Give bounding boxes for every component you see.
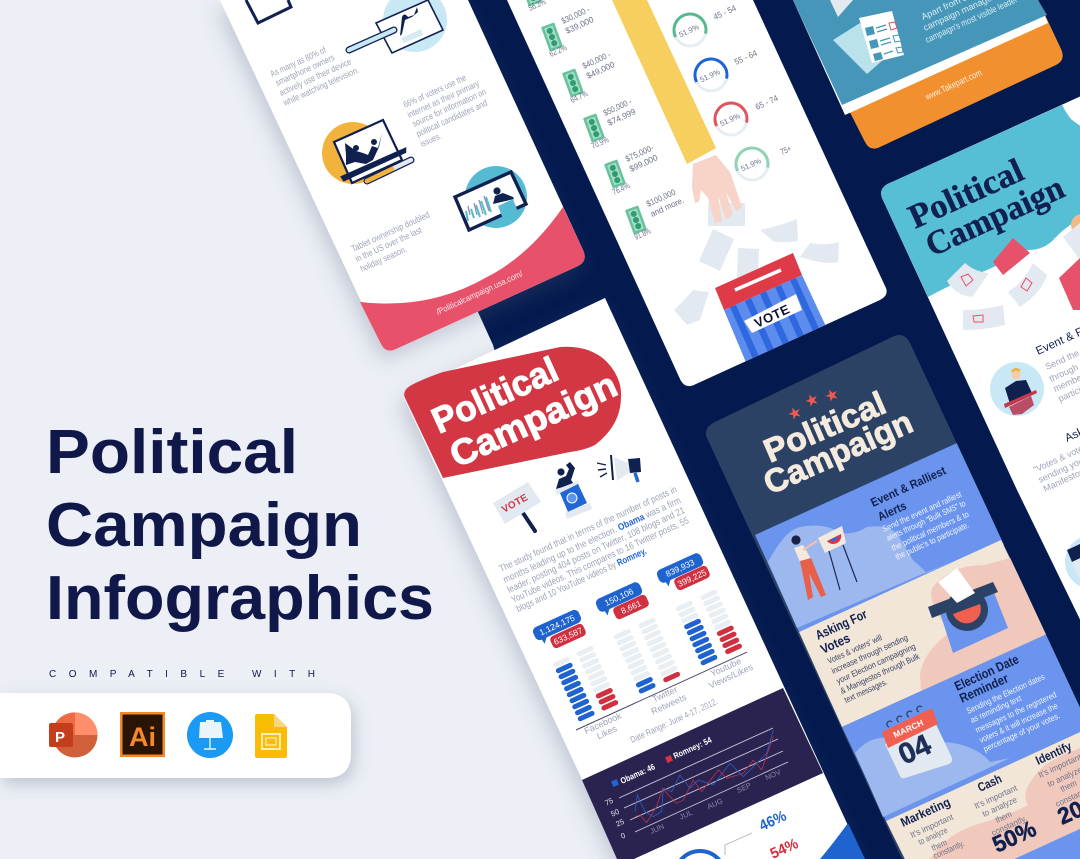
income labels: $74,999 (606, 106, 637, 128)
text: asking for votes paragraph: increase through sending (830, 632, 910, 676)
axis labels: Facebook (583, 710, 623, 736)
ballot box: VOTE (752, 301, 792, 331)
grid lines (619, 728, 788, 832)
age labels: 55 - 64 (733, 48, 759, 67)
value bubbles: 150,106 (603, 586, 635, 608)
axis labels: Likes (595, 723, 619, 741)
title: Campaign (758, 403, 918, 501)
gauge labels: 51.9% (698, 67, 722, 84)
text: cash description: to analyze (981, 794, 1019, 819)
age labels (712, 3, 793, 157)
icon: three stars: ★ (822, 385, 842, 407)
text: smartphone statistic (269, 45, 360, 108)
footer url: www.Takepart.com (923, 67, 983, 102)
panel: compatibility pill (0, 693, 351, 778)
icon: megaphone (597, 455, 641, 482)
icon: illustrator (120, 712, 165, 757)
falling ballots (947, 238, 1047, 330)
legend: Obama: 46 (619, 761, 657, 786)
heading: asking for votes (816, 611, 866, 653)
section: election date reminder (842, 634, 1080, 821)
text: identify description (1038, 754, 1080, 806)
panel: dark card with sections (700, 330, 1080, 859)
income labels: $99,000 (628, 152, 659, 174)
income labels: 62.2% (548, 42, 569, 59)
icon: calendar march 04: MARCH (892, 717, 925, 740)
icon: illustrator: Ai (129, 722, 156, 752)
axis labels: Youtube (709, 656, 743, 679)
text: election date paragraph: Sending the Election dates (965, 671, 1046, 716)
text: smartphone statistic: while watching television. (281, 65, 360, 108)
heading: identify: Identify (1033, 739, 1074, 768)
panel: teal-header card on right (881, 92, 1080, 640)
title: Political (425, 348, 564, 441)
heading: asking for votes: Asking For (813, 606, 869, 643)
heading: asking for votes: Votes (818, 630, 852, 657)
compatible with label: COMPATIBLE WITH (49, 669, 315, 680)
text: election date paragraph: messages to the registered (974, 689, 1058, 735)
heading: election date (954, 657, 1019, 703)
heading: event alerts: Alerts (875, 498, 909, 524)
red title banner (404, 347, 621, 478)
text: internet statistic: political candidates and (415, 98, 489, 139)
youtube views bars (675, 589, 743, 666)
text: marketing description: It's important (909, 811, 955, 840)
text: votes paragraph (1032, 439, 1080, 494)
age labels: 45 - 54 (712, 3, 738, 22)
panel: pink-footer card with device statistics (220, 0, 585, 351)
text: asking for votes paragraph: text messages. (843, 677, 889, 705)
gauge labels: 51.9% (739, 156, 763, 173)
x axis labels: NOV (764, 767, 782, 782)
income labels: 76.4% (611, 180, 632, 197)
icon: phone fragment (246, 0, 291, 23)
icon: dollar bills by income (520, 0, 647, 235)
text: event paragraph (1046, 352, 1080, 404)
axis labels (583, 656, 755, 741)
icon: speaker at podium (555, 462, 592, 519)
polling lines (635, 730, 773, 823)
income labels: $75,000- (624, 142, 655, 164)
text: marketing description: to analyze (917, 825, 949, 847)
hand (692, 155, 742, 223)
donut chart (675, 851, 725, 859)
income labels: 70.9% (590, 134, 611, 151)
text: tablet statistic: Tablet ownership doubled (350, 209, 431, 254)
value bubbles: 633,587 (552, 625, 584, 647)
income labels: and more. (649, 195, 686, 219)
text: internet statistic (402, 73, 489, 149)
text: study paragraph (498, 484, 691, 615)
axis labels: Twitter (651, 684, 679, 704)
value bubbles: 399,225 (676, 567, 708, 589)
teal header wave (881, 105, 1080, 297)
icon: google slides (255, 714, 287, 758)
icon: vote sign (493, 482, 541, 531)
income labels (527, 0, 686, 242)
text: identify description: them (1059, 778, 1078, 794)
text: cash description: constantly. (990, 813, 1028, 838)
income labels: 64.7% (569, 88, 590, 105)
text: internet statistic: issues. (419, 131, 443, 149)
text: asking for votes paragraph: your Election campaigning (835, 641, 917, 686)
age labels: 75+ (779, 143, 793, 157)
section: marketing cash identify (886, 727, 1080, 859)
text: tablet statistic: holiday season. (359, 244, 408, 274)
icon: keynote (187, 712, 233, 758)
text: smartphone statistic: actively use their device (278, 56, 353, 98)
title: Political (903, 152, 1029, 236)
income labels: $40,000 - (581, 49, 612, 71)
icon: candidate at podium (990, 362, 1044, 416)
ballot box (715, 253, 826, 362)
y axis labels: 0 (619, 831, 627, 841)
text: internet statistic: internet as their primary (406, 78, 481, 120)
text: cash description: them (994, 809, 1013, 825)
value bubbles: 1,124,175 (538, 612, 577, 637)
gauges by age group (674, 14, 768, 180)
text: event alerts paragraph: Send the event and ralliest (881, 489, 964, 534)
income labels: $39,000 (564, 14, 595, 36)
dark line chart panel (582, 688, 823, 859)
panel: red-header card with bar chart (404, 298, 880, 859)
footer url: /Politicalcampaign.usa.com/ (435, 268, 525, 317)
income labels: $30,000 - (560, 4, 591, 26)
legend: Romney: 54 (672, 735, 713, 761)
bar chart: social media engagement (547, 588, 747, 730)
falling ballot papers (674, 219, 839, 325)
icon: three stars: ★ (785, 403, 805, 425)
twitter retweets bars (613, 617, 681, 694)
icon: ballot in slot (928, 568, 1008, 653)
text: marketing description (910, 814, 964, 858)
text: tablet statistic (350, 209, 431, 274)
text: marketing description: them (930, 837, 948, 853)
heading: event alerts: Event & Ralliest (868, 463, 948, 510)
yellow arm (612, 0, 716, 164)
text: internet statistic: source for information on (411, 87, 488, 129)
stat: fifty percent: 50% (988, 815, 1040, 858)
y axis labels (603, 796, 627, 841)
panel: teal card with orange footer (793, 0, 1063, 149)
title: Campaign (443, 364, 623, 475)
gauge labels (677, 22, 763, 173)
text: event alerts paragraph: the public's to participate. (894, 520, 971, 562)
title: Political (758, 384, 891, 469)
text: election date paragraph: percentage of your votes. (982, 710, 1061, 754)
icon: vote sign: VOTE (500, 492, 530, 516)
ballot box and hand at right edge (1059, 214, 1080, 310)
income labels: $49,000 (585, 59, 616, 81)
main headline: Infographics (46, 564, 434, 633)
heading: cash: Cash (975, 772, 1004, 795)
date range: Date Range: June 4-17, 2012. (629, 696, 719, 745)
icon: tablet with presenter (455, 166, 527, 230)
value bubbles: 8,661 (619, 598, 643, 616)
y axis labels: 25 (614, 817, 626, 829)
section: event and rallies alerts (755, 443, 1004, 632)
text: study paragraph: months leading up to the election. Obama was a firm (502, 495, 683, 586)
facebook likes bars (552, 645, 619, 722)
title: Campaign (920, 169, 1070, 264)
panel: voter turnout card with arm and ballot box (507, 0, 887, 386)
axis labels: Retweets (650, 692, 688, 717)
icon: powerpoint: P (55, 729, 65, 746)
x axis labels (648, 767, 782, 836)
text: event alerts paragraph: the political members & to (890, 509, 970, 553)
text: election date paragraph (965, 671, 1061, 754)
axis labels: Views/Likes (707, 662, 755, 691)
gauge labels: 51.9% (718, 111, 742, 128)
x axis labels: SEP (735, 781, 753, 795)
y axis labels: 75 (603, 796, 615, 808)
main headline (46, 418, 434, 633)
x axis labels: JUL (678, 808, 694, 822)
value bubbles: 839,933 (664, 557, 696, 579)
value bubbles (531, 552, 711, 649)
icon: powerpoint (49, 712, 98, 758)
text: event alerts paragraph: alerts through "Bulk SMS" to (885, 498, 967, 543)
icon: laptop with two candidates (322, 120, 411, 184)
income labels: $100,000 (645, 187, 677, 209)
illustration: woman with target easel (791, 526, 857, 600)
text: study paragraph: YouTube videos. This compares to 16 Twitter posts, 55 (510, 515, 691, 606)
text: election date paragraph: as reminding text (969, 693, 1023, 725)
icon: calendar fragment (1065, 535, 1080, 589)
icon: three stars: ★ (802, 390, 822, 412)
heading: election date: Reminder (957, 671, 1011, 706)
text: study paragraph: leader, posting 404 posts on Twitter, 108 blogs and 21 (506, 505, 687, 596)
main headline: Political (46, 418, 298, 487)
y axis labels: 50 (609, 807, 621, 819)
chart baseline (576, 652, 747, 730)
heading: event alerts (870, 466, 946, 521)
icon: television with speaker (349, 0, 447, 53)
age labels: 65 - 74 (754, 93, 780, 112)
heading: marketing: Marketing (898, 795, 952, 830)
text: event paragraph: Send the (1044, 348, 1080, 372)
stat: 46 percent: 46% (757, 808, 789, 835)
text: cash description (974, 785, 1027, 836)
income labels: $50,000 - (602, 96, 633, 118)
section: asking for votes (799, 540, 1047, 727)
icon: calendar march 04 (882, 706, 952, 778)
paper under hand (708, 203, 745, 226)
text: study paragraph: The study found that in terms of the number of posts in (498, 484, 679, 575)
text: study paragraph: blogs and 10 YouTube videos by Romney. (515, 546, 648, 615)
gauge labels: 51.9% (677, 22, 701, 39)
pink footer wave (360, 207, 585, 351)
text: asking for votes paragraph (826, 632, 922, 705)
blue corner shape (820, 823, 865, 859)
icon: ballot documents (830, 0, 904, 74)
icon: calendar march 04: 04 (894, 729, 936, 771)
x axis labels: JUN (648, 822, 665, 836)
text: tablet statistic: in the US over the last (354, 225, 424, 264)
text: smartphone statistic: As many as 80% of (269, 45, 328, 79)
legend (611, 735, 713, 787)
text: election date paragraph: voters & it will increase the (978, 700, 1059, 745)
heading: election date: Election Date (952, 651, 1021, 694)
text: asking for votes paragraph: & Manigestos through Bulk (839, 651, 922, 696)
lower blue section (1014, 828, 1080, 859)
navy backdrop behind cards (336, 0, 1080, 859)
text: smartphone statistic: smartphone owners (274, 52, 336, 88)
icon: three stars (788, 390, 838, 420)
text: asking for votes paragraph: Votes & voters' will (826, 632, 884, 666)
text: event alerts paragraph (881, 489, 971, 562)
income labels: 91.8% (633, 226, 653, 242)
x axis labels: AUG (706, 796, 724, 811)
text: cash description: It's important (973, 782, 1019, 811)
leader line (725, 833, 752, 855)
main headline: Campaign (46, 491, 362, 560)
text: internet statistic: 66% of voters use the (402, 73, 468, 110)
text: event paragraph: through (1048, 362, 1080, 384)
